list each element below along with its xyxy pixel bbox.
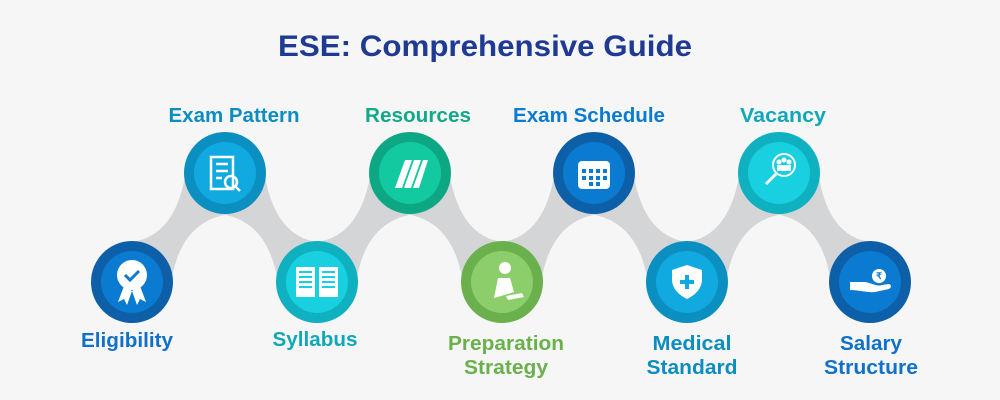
icon: magnifier people	[766, 154, 795, 184]
node: Medical Standard	[646, 241, 738, 379]
node: Exam Pattern	[168, 105, 300, 214]
connector wave	[132, 177, 870, 277]
icon: resource bars	[395, 160, 428, 188]
node: Salary Structure: ₹	[876, 271, 882, 281]
icon: hand with coin	[850, 269, 891, 292]
icon: calendar	[578, 161, 610, 189]
node: Preparation Strategy: Preparation	[448, 333, 564, 355]
title: ESE: Comprehensive Guide	[278, 30, 692, 63]
node: Exam Schedule: Exam Schedule	[513, 105, 665, 127]
node: Preparation Strategy: Strategy	[464, 357, 549, 379]
node: Preparation Strategy	[448, 241, 564, 379]
icon: shield	[672, 265, 702, 299]
node: Syllabus: Syllabus	[272, 329, 358, 351]
node: Eligibility	[81, 241, 174, 352]
node: Vacancy	[738, 105, 827, 214]
node: Medical Standard: Medical	[652, 333, 732, 355]
node: Resources	[365, 105, 471, 214]
node: Resources: Resources	[365, 105, 471, 127]
node: Exam Schedule	[513, 105, 665, 214]
node: Eligibility: Eligibility	[81, 330, 174, 352]
node: Syllabus	[272, 241, 358, 351]
node: Vacancy: Vacancy	[740, 105, 827, 127]
node: Salary Structure: Structure	[824, 357, 918, 379]
icon: badge	[117, 260, 147, 305]
node: Salary Structure	[824, 241, 918, 379]
icon: book	[296, 267, 338, 297]
icon: document search	[211, 157, 240, 191]
node: Medical Standard: Standard	[646, 357, 738, 379]
icon: person writing	[494, 262, 524, 300]
node: Salary Structure: Salary	[840, 333, 903, 355]
node: Exam Pattern: Exam Pattern	[168, 105, 300, 127]
